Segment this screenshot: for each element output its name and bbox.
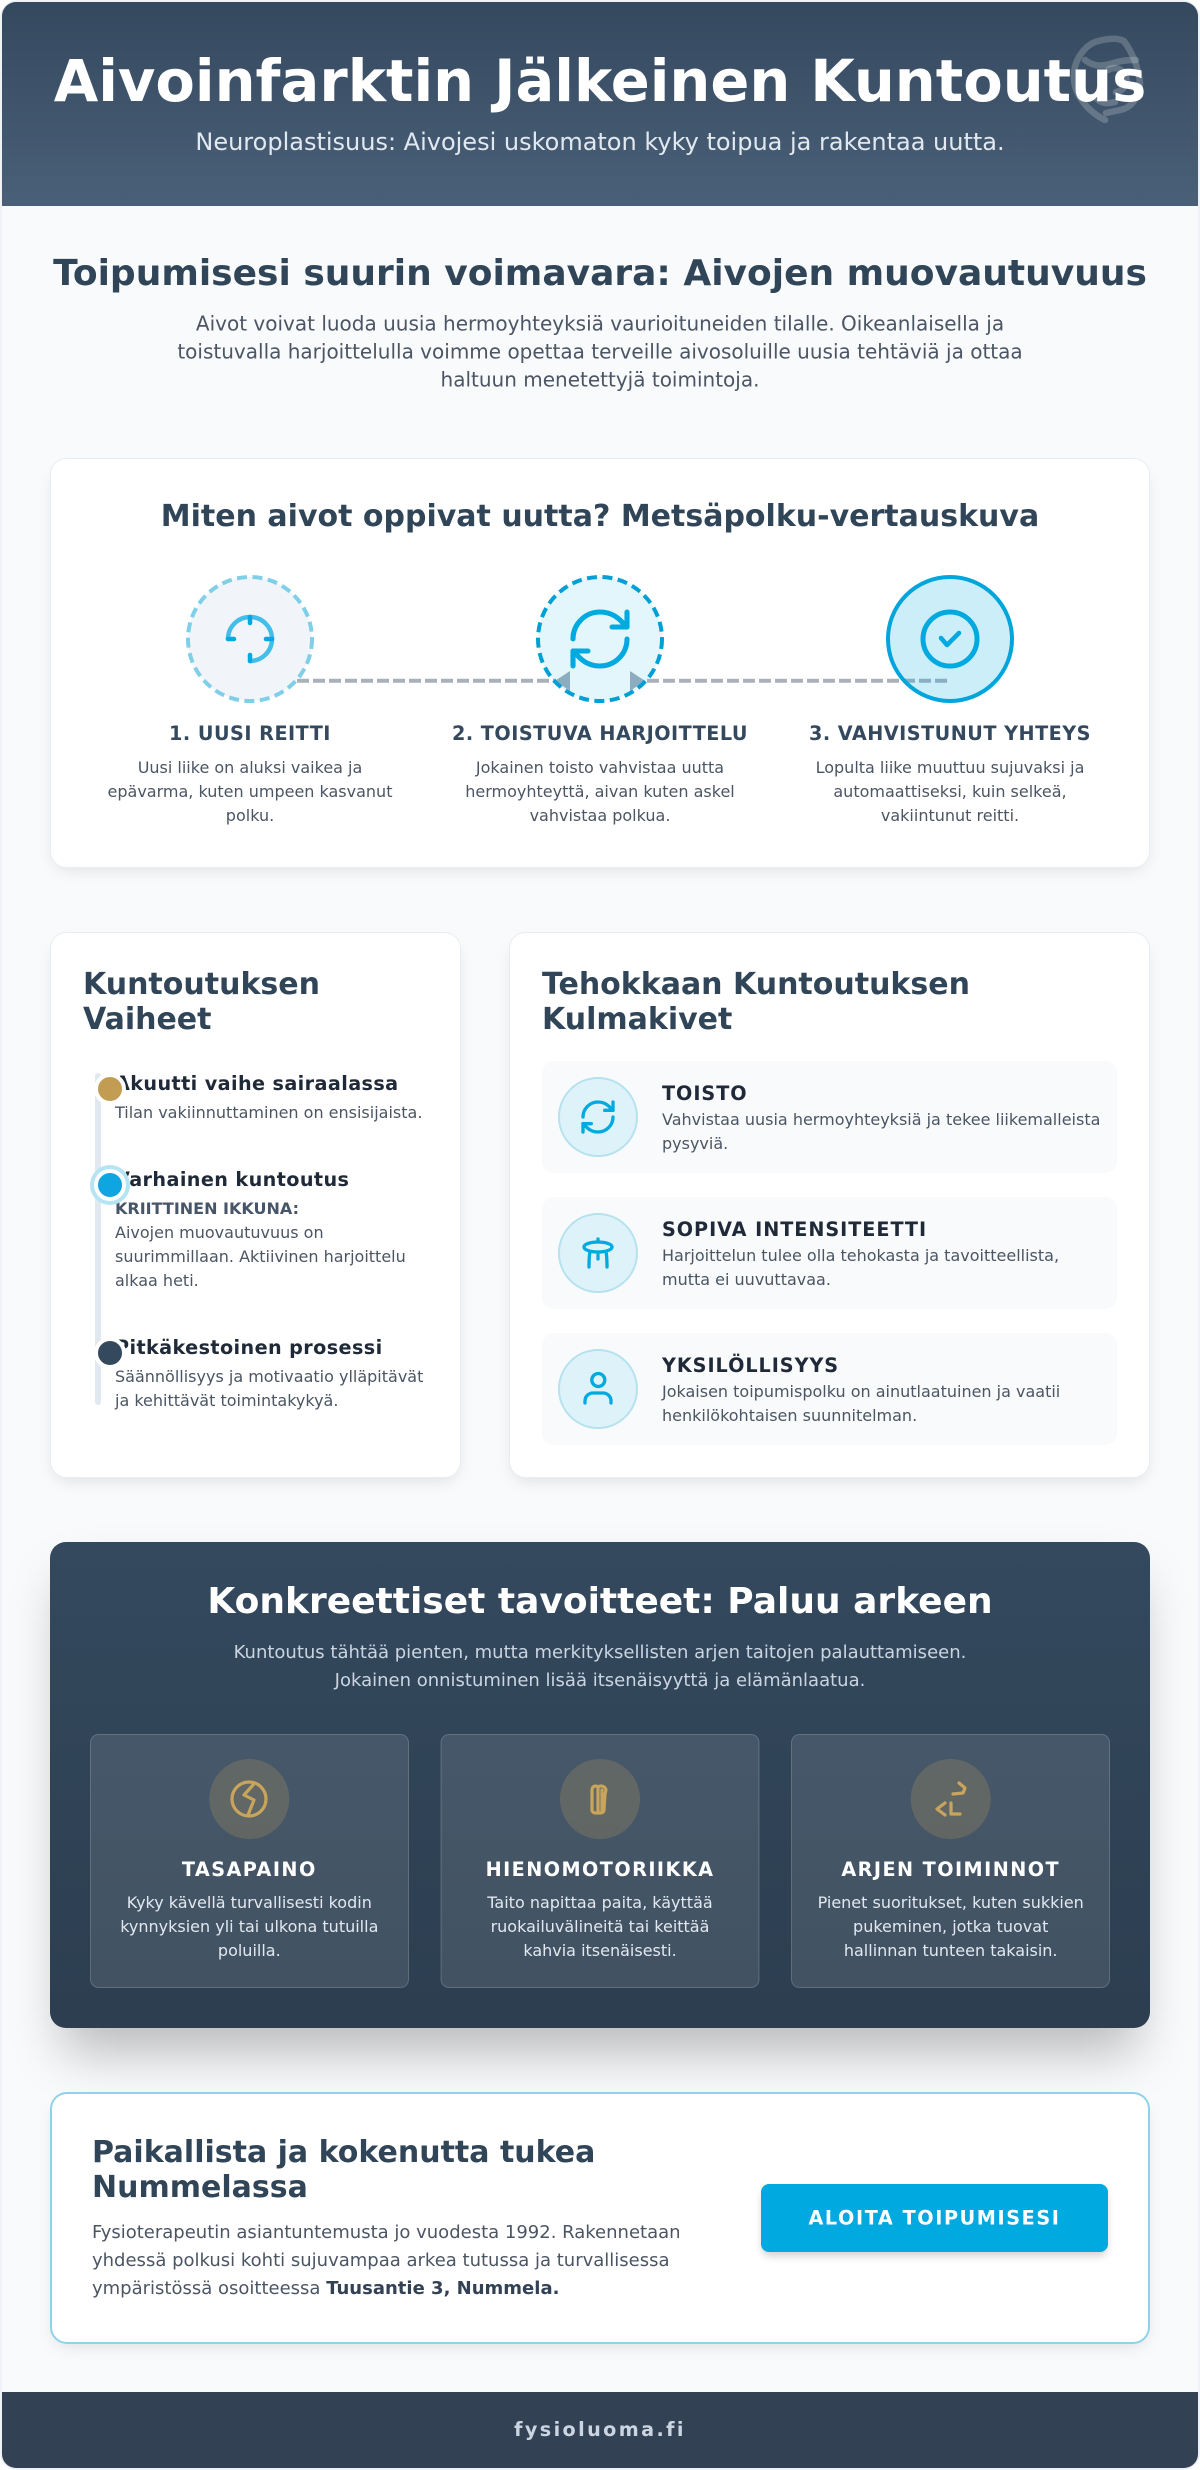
- row text: Harjoittelun tulee olla tehokasta ja tavoitteellista,: [662, 1246, 1059, 1265]
- panel heading: [542, 967, 970, 1037]
- card shadow: [53, 2105, 1147, 2347]
- panel text: yhdessä polkusi kohti sujuvampaa arkea tutussa ja turvallisessa: [92, 2250, 670, 2271]
- phase 2: [90, 1165, 406, 1290]
- icon: repeat: [559, 1078, 637, 1156]
- icon: brain watermark: [1074, 39, 1140, 120]
- goal card: [792, 1734, 1110, 1988]
- icon: repeat circle: [538, 577, 662, 701]
- step 2 description: [465, 758, 735, 825]
- row text: [662, 1246, 1059, 1289]
- row text: pysyviä.: [662, 1134, 728, 1153]
- panel: cornerstones: [510, 932, 1150, 1481]
- panel intro: [234, 1642, 966, 1691]
- phase 1: [96, 1072, 422, 1122]
- goal text: Pienet suoritukset, kuten sukkien: [818, 1893, 1084, 1912]
- step 3 description: Lopulta liike muuttuu sujuvaksi ja: [816, 758, 1084, 777]
- step 2 description: vahvistaa polkua.: [530, 806, 670, 825]
- card heading: Miten aivot oppivat uutta? Metsäpolku-vertauskuva: [161, 499, 1039, 534]
- card shadow: [53, 945, 458, 1481]
- title: Aivoinfarktin Jälkeinen Kuntoutus: [54, 48, 1146, 115]
- icon: balance: [209, 1759, 289, 1839]
- panel heading: Konkreettiset tavoitteet: Paluu arkeen: [207, 1581, 993, 1622]
- goal text: Taito napittaa paita, käyttää: [486, 1893, 713, 1912]
- panel heading: Vaiheet: [83, 1002, 212, 1037]
- phase 3 text: ja kehittävät toimintakykyä.: [114, 1391, 338, 1410]
- intro text: Aivot voivat luoda uusia hermoyhteyksiä vaurioituneiden tilalle. Oikeanlaisella ja: [196, 312, 1004, 336]
- intro text: [177, 312, 1023, 392]
- card shadow: [512, 945, 1147, 1481]
- phase 3 title: Pitkäkestoinen prosessi: [115, 1336, 383, 1359]
- row text: Vahvistaa uusia hermoyhteyksiä ja tekee liikemalleista: [662, 1110, 1100, 1129]
- call to action button: ALOITA TOIPUMISESI: [808, 2206, 1061, 2230]
- arrow: step 2 to step 3: [630, 671, 948, 691]
- goal text: pukeminen, jotka tuovat: [853, 1917, 1048, 1936]
- intro text: toistuvalla harjoittelulla voimme opettaa terveille aivosoluille uusia tehtäviä ja ottaa: [177, 340, 1023, 364]
- goal text: Kyky kävellä turvallisesti kodin: [127, 1893, 372, 1912]
- step 3 title: 3. VAHVISTUNUT YHTEYS: [809, 722, 1091, 745]
- icon: fine motor: [560, 1759, 640, 1839]
- row text: mutta ei uuvuttavaa.: [662, 1270, 831, 1289]
- icon: strengthened check circle: [888, 577, 1012, 701]
- icon: daily activities: [911, 1759, 991, 1839]
- row text: [661, 1382, 1060, 1425]
- step 3 description: vakiintunut reitti.: [881, 806, 1019, 825]
- row title: SOPIVA INTENSITEETTI: [662, 1218, 927, 1241]
- goal title: HIENOMOTORIIKKA: [486, 1858, 714, 1881]
- header background: [2, 2, 1198, 206]
- panel heading: [92, 2135, 595, 2205]
- footer: [2, 2392, 1198, 2468]
- panel: local support call to action: [51, 2093, 1149, 2347]
- step 1 title: 1. UUSI REITTI: [169, 722, 331, 745]
- step 1 description: [108, 758, 392, 825]
- goal text: poluilla.: [218, 1941, 281, 1960]
- panel heading: Paikallista ja kokenutta tukea: [92, 2135, 595, 2170]
- row title: TOISTO: [662, 1082, 748, 1105]
- goal: balance: [90, 1734, 408, 1988]
- phase 2 marker: [90, 1165, 130, 1205]
- step 3: [809, 577, 1091, 825]
- panel: forest path metaphor: [50, 458, 1150, 870]
- phase 2 text: suurimmillaan. Aktiivinen harjoittelu: [115, 1247, 406, 1266]
- phase 1 text: Tilan vakiinnuttaminen on ensisijaista.: [114, 1103, 422, 1122]
- footer background: [2, 2392, 1198, 2468]
- panel heading: Kuntoutuksen: [83, 967, 320, 1002]
- panel: rehabilitation phases: [50, 932, 460, 1481]
- panel text: [92, 2222, 681, 2299]
- phase 3: [96, 1336, 423, 1410]
- goal: fine motor skills: [441, 1734, 759, 1988]
- subtitle: Neuroplastisuus: Aivojesi uskomaton kyky toipua ja rakentaa uutta.: [195, 128, 1005, 156]
- icon: new path circle: [188, 577, 312, 701]
- panel heading: [83, 967, 320, 1037]
- card background: [510, 932, 1150, 1478]
- goal text: [486, 1893, 713, 1960]
- step 1: [108, 577, 392, 825]
- phase 3 marker: [96, 1339, 124, 1367]
- icon: stool: [559, 1214, 637, 1292]
- step 2 description: hermoyhteyttä, aivan kuten askel: [465, 782, 735, 801]
- row background: [542, 1061, 1117, 1173]
- step 1 description: Uusi liike on aluksi vaikea ja: [138, 758, 362, 777]
- phase 2 critical label: KRIITTINEN IKKUNA:: [115, 1199, 299, 1218]
- card background: [50, 1542, 1150, 2028]
- call to action button: [761, 2184, 1108, 2256]
- phase 1 marker: [96, 1075, 124, 1103]
- card background: [50, 458, 1150, 868]
- card shadow: [62, 1579, 1138, 2053]
- panel text: ympäristössä osoitteessa Tuusantie 3, Nummela.: [92, 2278, 559, 2299]
- goal card: [441, 1734, 759, 1988]
- step 3 description: [816, 758, 1084, 825]
- goal card: [90, 1734, 408, 1988]
- step 1 description: epävarma, kuten umpeen kasvanut: [108, 782, 392, 801]
- timeline rail: [95, 1073, 101, 1405]
- row text: Jokaisen toipumispolku on ainutlaatuinen ja vaatii: [661, 1382, 1060, 1401]
- row title: YKSILÖLLISYYS: [661, 1353, 839, 1377]
- row text: [662, 1110, 1100, 1153]
- intro heading: Toipumisesi suurin voimavara: Aivojen muovautuvuus: [53, 253, 1147, 294]
- phase 3 text: Säännöllisyys ja motivaatio ylläpitävät: [115, 1367, 423, 1386]
- phase 2 title: Varhainen kuntoutus: [115, 1168, 349, 1191]
- panel heading: Tehokkaan Kuntoutuksen: [542, 967, 970, 1002]
- header: [2, 2, 1198, 206]
- card background: [51, 2093, 1149, 2343]
- phase 1 title: Akuutti vaihe sairaalassa: [115, 1072, 399, 1095]
- panel heading: Nummelassa: [92, 2170, 308, 2205]
- icon: person: [559, 1350, 637, 1428]
- panel intro: Kuntoutus tähtää pienten, mutta merkityksellisten arjen taitojen palauttamiseen.: [234, 1642, 966, 1663]
- phase 3 text: [114, 1367, 423, 1410]
- phase 2 text: Aivojen muovautuvuus on: [115, 1223, 324, 1242]
- step 1 description: polku.: [226, 806, 274, 825]
- footer website: fysioluoma.fi: [514, 2418, 686, 2441]
- phase 2 text: alkaa heti.: [115, 1271, 199, 1290]
- step 2: [452, 577, 748, 825]
- row: individuality: [542, 1333, 1117, 1445]
- goal title: ARJEN TOIMINNOT: [841, 1858, 1060, 1881]
- goal text: [818, 1893, 1084, 1960]
- panel: concrete goals: [50, 1542, 1150, 2053]
- goal text: [120, 1893, 378, 1960]
- card background: [50, 932, 460, 1478]
- row background: [542, 1333, 1117, 1445]
- goal text: kahvia itsenäisesti.: [523, 1941, 677, 1960]
- intro text: haltuun menetettyjä toimintoja.: [441, 368, 759, 392]
- intro section: [53, 253, 1147, 392]
- row background: [542, 1197, 1117, 1309]
- goal text: kynnyksien yli tai ulkona tutuilla: [120, 1917, 378, 1936]
- panel intro: Jokainen onnistuminen lisää itsenäisyyttä ja elämänlaatua.: [334, 1670, 865, 1691]
- arrow: step 1 to step 2: [297, 671, 570, 691]
- goal text: ruokailuvälineitä tai keittää: [491, 1917, 709, 1936]
- step 2 description: Jokainen toisto vahvistaa uutta: [475, 758, 724, 777]
- card shadow: [53, 471, 1147, 870]
- step 3 description: automaattiseksi, kuin selkeä,: [833, 782, 1067, 801]
- row: repetition: [542, 1061, 1117, 1173]
- goal text: hallinnan tunteen takaisin.: [844, 1941, 1058, 1960]
- goal title: TASAPAINO: [182, 1858, 317, 1881]
- panel heading: Kulmakivet: [542, 1002, 732, 1037]
- phase 2 text: [115, 1223, 406, 1290]
- row text: henkilökohtaisen suunnitelman.: [662, 1406, 917, 1425]
- panel text: Fysioterapeutin asiantuntemusta jo vuodesta 1992. Rakennetaan: [92, 2222, 681, 2243]
- row: intensity: [542, 1197, 1117, 1309]
- step 2 title: 2. TOISTUVA HARJOITTELU: [452, 722, 748, 745]
- goal: daily activities: [792, 1734, 1110, 1988]
